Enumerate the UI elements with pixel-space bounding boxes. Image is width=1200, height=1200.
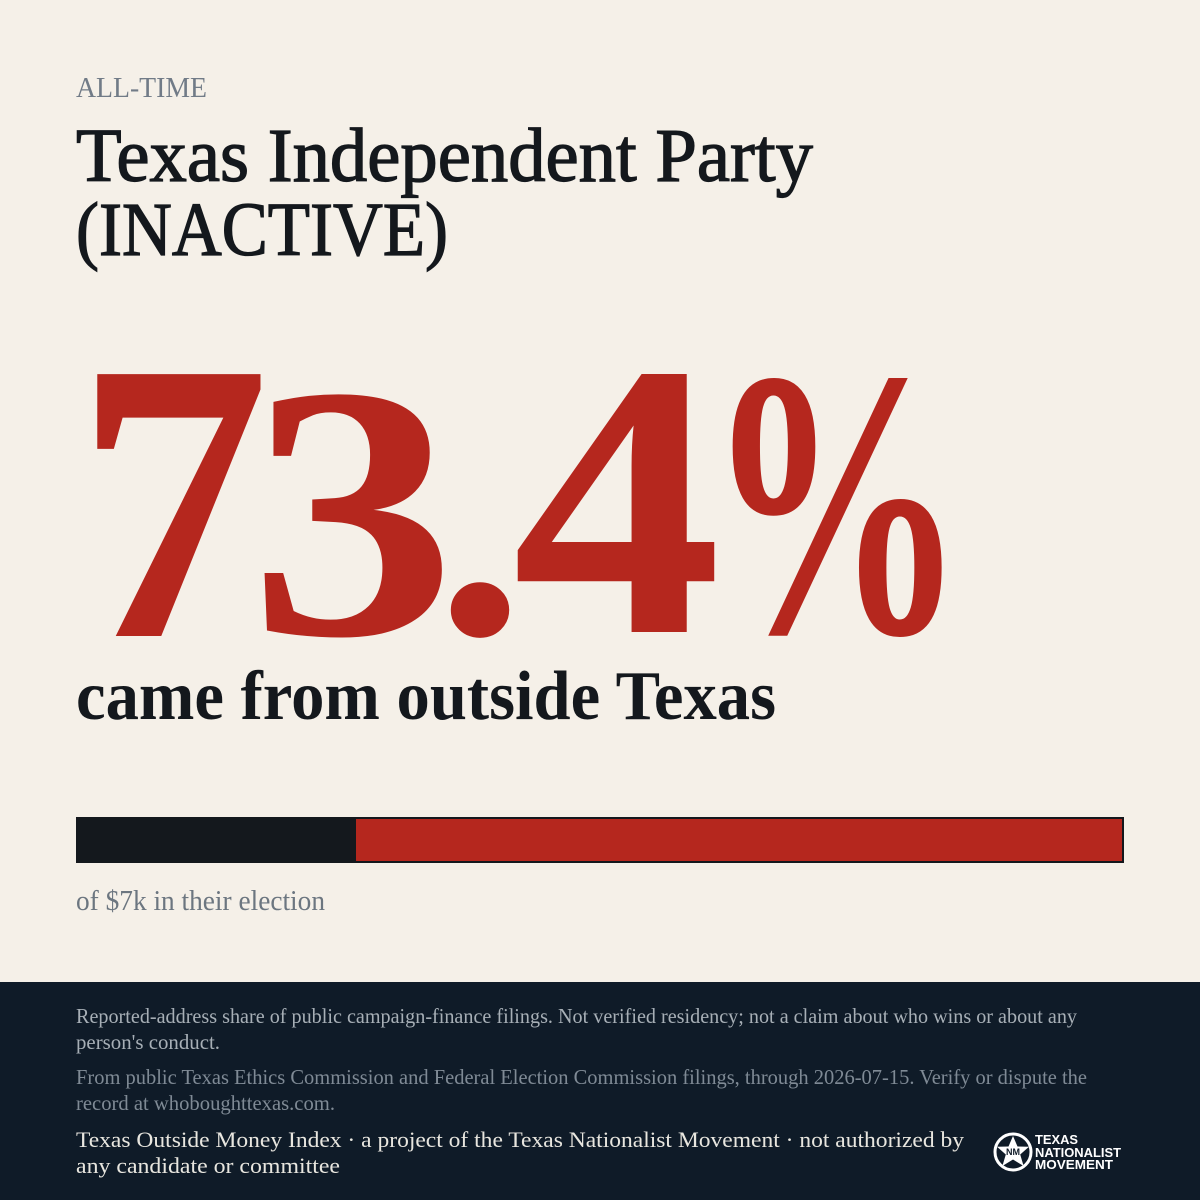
big percentage xyxy=(75,280,966,723)
disclaimer: Reported-address share of public campaign-finance filings. Not verified residency; not a claim about who wins or about any xyxy=(76,1004,1077,1028)
bar caption: of $7k in their election xyxy=(76,885,325,917)
footer panel xyxy=(0,982,1200,1200)
disclaimer: person's conduct. xyxy=(76,1030,220,1054)
title: (INACTIVE) xyxy=(76,188,448,272)
source note: From public Texas Ethics Commission and Federal Election Commission filings, through 2026-07-15. Verify or dispute the xyxy=(76,1065,1087,1089)
source note: record at whoboughttexas.com. xyxy=(76,1091,335,1115)
source note xyxy=(76,1065,1087,1115)
logo wordmark: TEXAS xyxy=(1035,1132,1078,1147)
share bar xyxy=(76,817,1124,863)
eyebrow label: ALL-TIME xyxy=(76,73,207,104)
credit line xyxy=(76,1127,964,1178)
title xyxy=(76,114,813,272)
big percentage: 4 xyxy=(512,283,722,717)
credit line: Texas Outside Money Index · a project of the Texas Nationalist Movement · not authorized by xyxy=(76,1127,964,1152)
title: Texas Independent Party xyxy=(76,114,813,198)
big percentage: % xyxy=(706,292,966,715)
big percentage: 3 xyxy=(249,312,456,713)
logo wordmark: MOVEMENT xyxy=(1035,1157,1113,1172)
credit line: any candidate or committee xyxy=(76,1153,340,1178)
subheading: came from outside Texas xyxy=(76,658,776,735)
logo wordmark xyxy=(1035,1132,1121,1172)
icon: star in circle: NM xyxy=(1006,1147,1020,1157)
logo wordmark: NATIONALIST xyxy=(1035,1145,1121,1160)
disclaimer xyxy=(76,1004,1077,1054)
big percentage: . xyxy=(435,328,525,708)
big percentage: 7 xyxy=(75,280,270,723)
logo: Texas Nationalist Movement xyxy=(995,1132,1121,1172)
